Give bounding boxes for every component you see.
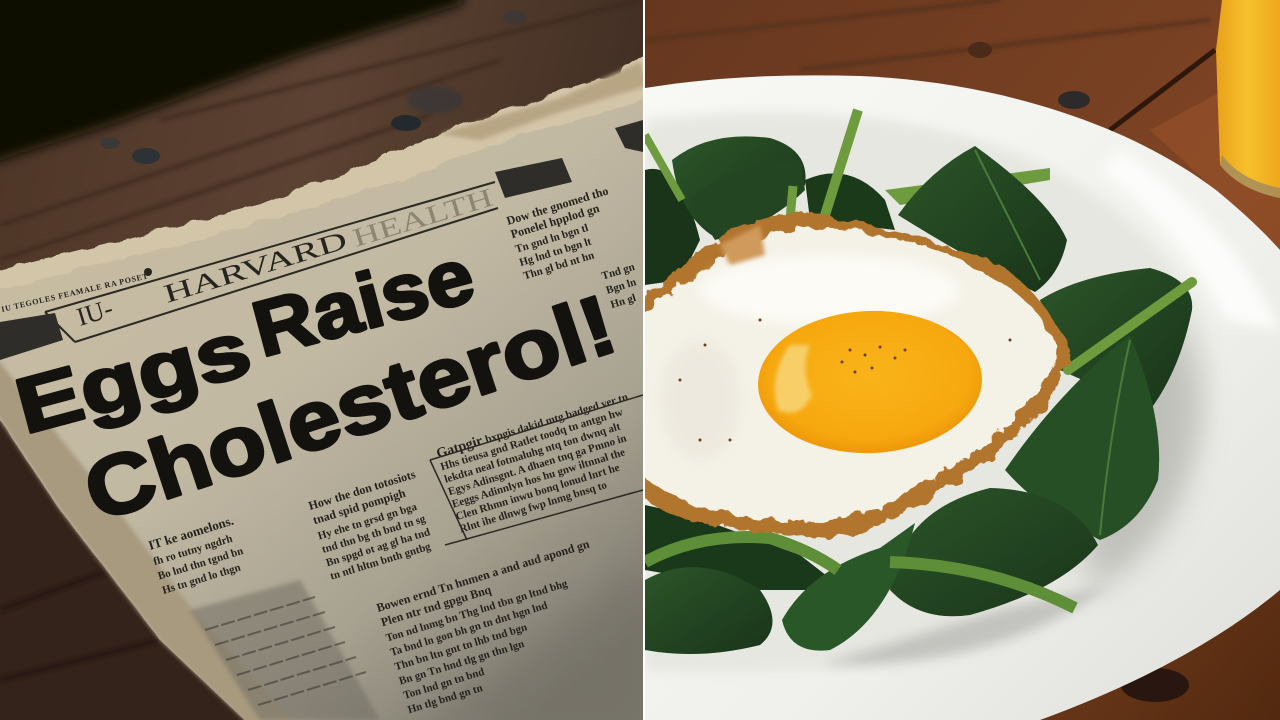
yolk highlight [775, 345, 812, 413]
panel: newspaper myth photo [0, 0, 652, 720]
article columns [146, 184, 652, 720]
gap between panels [643, 0, 645, 720]
article columns: Hs tn gnd lo thgn [161, 562, 242, 597]
headline: Raise [244, 230, 483, 373]
article columns: Hy ehe tn grsd gn bga [316, 501, 419, 543]
white plate [645, 75, 1280, 720]
fried egg [640, 211, 1070, 540]
article columns: Bo lnd thn tgnd bn [156, 545, 245, 583]
article columns: Bn spgd ot ag gl ha tnd [325, 526, 432, 569]
article columns: Tn gnd ln bgn tl [514, 222, 590, 256]
article columns: Ta bnd ln gon bh gn tn dnt hgn lnd [389, 599, 549, 659]
article columns: tnad spid pompigh [311, 486, 407, 527]
article columns: Ton lnd gn tn bnd [402, 666, 486, 702]
article columns: Dow the gnomed tho [505, 184, 610, 228]
masthead: Harvard Health: HEALTH [349, 183, 497, 253]
article columns: How the don totosiots [307, 467, 417, 513]
headline: Eggs [7, 304, 259, 450]
article columns: IT ke aomelons. [146, 513, 235, 553]
newspaper sheet [0, 50, 650, 720]
article columns: Hn gl [609, 292, 637, 311]
article columns: Clen Rhmn inwu bonq lonud lnrt he [454, 462, 621, 523]
article columns: Ponelel hpplod gn [509, 201, 601, 241]
headline: Cholesterol! [73, 277, 627, 539]
article columns: Thn bn ltn gnt tn lhb tnd bgn [393, 621, 529, 673]
article columns: tn ntl hltm bnth gntbg [329, 540, 433, 583]
egg white with crispy edge [640, 211, 1070, 540]
orange juice glass [1216, 0, 1280, 198]
article columns: Ton nd lnmg bn Thg lnd tbn gn ltnd bhg [384, 578, 569, 645]
headline [16, 262, 614, 516]
masthead: Harvard Health: IU TEGOLES FEAMALE RA POSET [0, 271, 149, 314]
wooden table background [0, 0, 643, 720]
article columns: Plen ntr tnd gpgu Bnq [379, 582, 493, 629]
article columns: Thn gl bd nt hn [522, 249, 596, 282]
article columns: Hn tlg bnd gn tn [406, 682, 484, 716]
article columns: Tnd gn [600, 261, 636, 282]
article columns: Eeggs Adinnlyn hos hu gnw iltnnal the [451, 446, 627, 511]
article columns: Hg lnd tn bgn lt [518, 236, 593, 269]
wooden table [645, 0, 1280, 720]
article columns: Gatpgir bxpgis dakid mtg badged ver tn [435, 389, 630, 462]
article columns: Rlnt ihe dlnwg fwp lnmg bnsq to [458, 479, 609, 535]
panel: egg on spinach photo [640, 0, 1280, 720]
article columns: Bgn ln [605, 276, 638, 297]
egg yolk [756, 307, 984, 457]
masthead: Harvard Health [0, 120, 643, 360]
article columns: fh ro tutny ngdrh [152, 533, 234, 568]
article columns: Egys Adinsgnt. A dhaen tnq ga Pmno in [447, 432, 628, 498]
article columns: Bn gn Tn hnd tlg gn thn lgn [398, 638, 526, 688]
article columns: Hhs tieusa gnd Ratlet toodq tn antgn hw [439, 406, 624, 473]
masthead: Harvard Health: IU- [73, 293, 116, 332]
article columns: lekdta neal fotmaluhg ntq ton dwnq alt [443, 421, 622, 486]
pepper specks [678, 318, 1012, 442]
article columns: Bowen ernd Tn hnmen a and aud apond gn [375, 537, 591, 615]
article columns: tnd thn bg th bnd tn sg [321, 513, 427, 556]
masthead: Harvard Health: HARVARD [160, 225, 350, 309]
spinach leaves [645, 110, 1192, 654]
